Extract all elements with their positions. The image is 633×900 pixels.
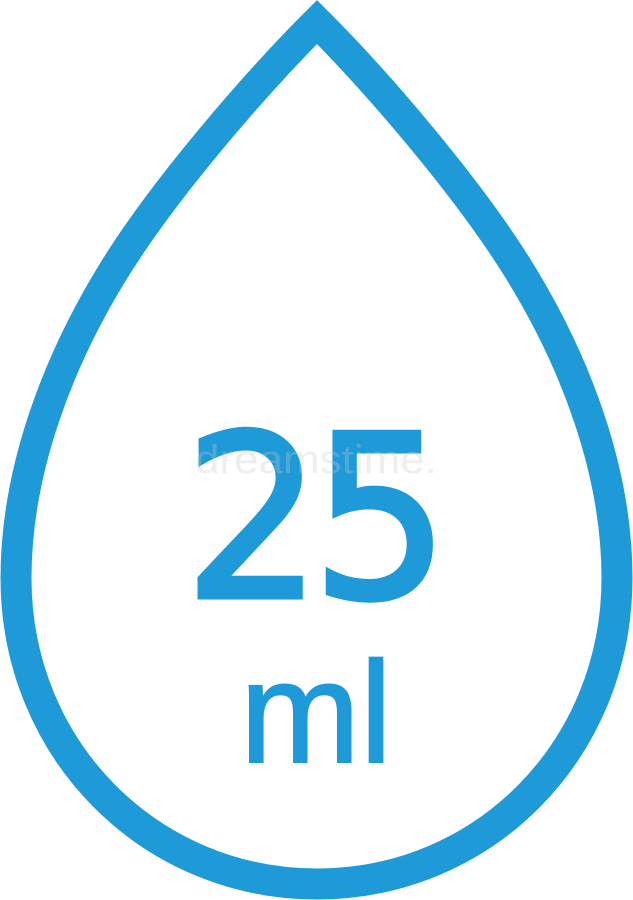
number: 25: 25 [184,388,449,651]
unit: ml: ml [240,632,392,793]
watermark: dreamstime. [195,438,437,482]
